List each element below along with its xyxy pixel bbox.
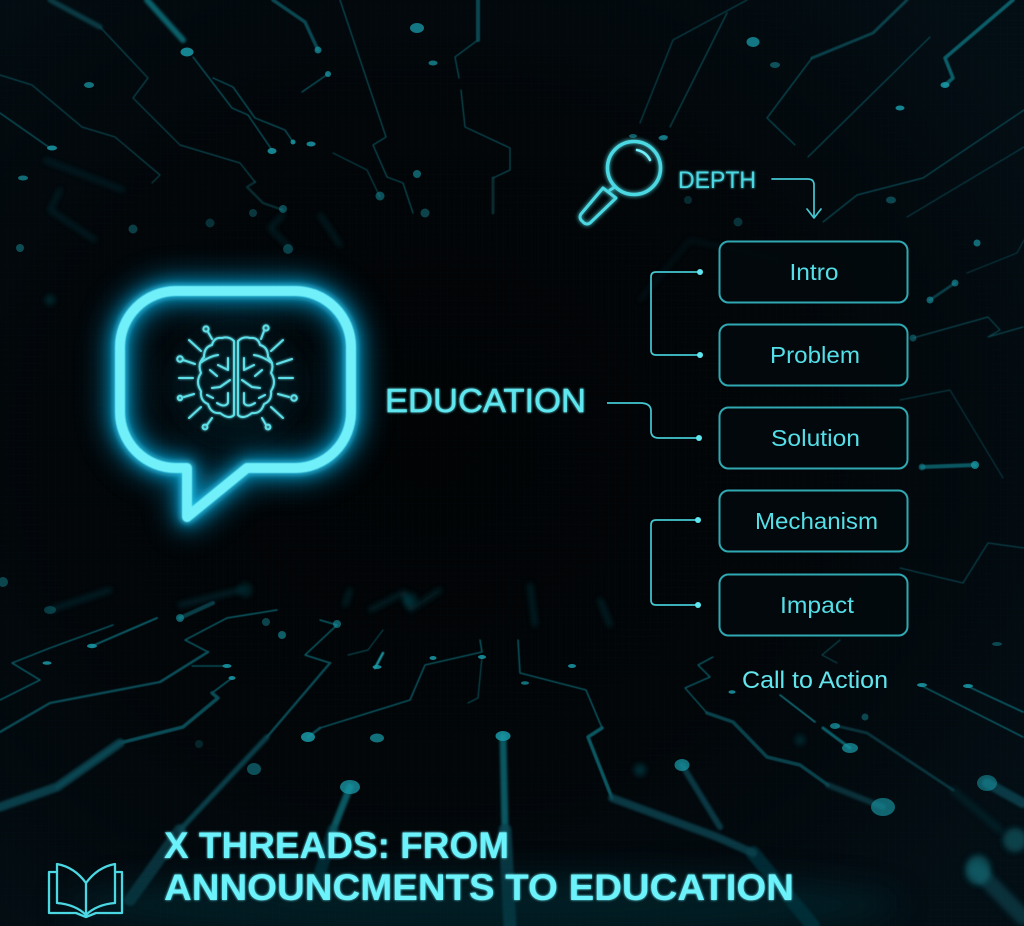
box: mechanism: Mechanism — [755, 508, 878, 534]
bracket: intro and problem — [651, 269, 703, 358]
connector: education to solution — [607, 403, 702, 441]
box: intro — [720, 242, 908, 302]
speech bubble outline — [120, 291, 351, 517]
box: impact: Impact — [780, 592, 854, 618]
box: solution — [720, 408, 908, 468]
background: blurred bokeh nodes — [45, 295, 1024, 885]
icon: brain — [177, 325, 297, 429]
box: problem — [720, 324, 908, 386]
arrow: depth to intro — [772, 179, 821, 218]
icon: open book — [49, 864, 122, 917]
box: problem: Problem — [770, 342, 860, 368]
title — [164, 824, 794, 908]
label: call to action: Call to Action — [742, 667, 888, 694]
brain backdrop glow — [166, 323, 306, 447]
speech bubble with brain — [120, 291, 351, 517]
title: ANNOUNCMENTS TO EDUCATION — [164, 866, 794, 908]
box: intro: Intro — [790, 259, 838, 285]
box: impact — [720, 574, 908, 636]
background: glow behind title — [60, 873, 900, 926]
box: mechanism — [720, 490, 908, 552]
box: solution: Solution — [771, 425, 860, 451]
bracket: mechanism and impact — [651, 517, 701, 608]
label: depth: DEPTH — [678, 167, 756, 194]
heading: education: EDUCATION — [385, 383, 586, 420]
title: X THREADS: FROM — [164, 824, 509, 866]
icon: magnifying glass — [580, 142, 660, 224]
